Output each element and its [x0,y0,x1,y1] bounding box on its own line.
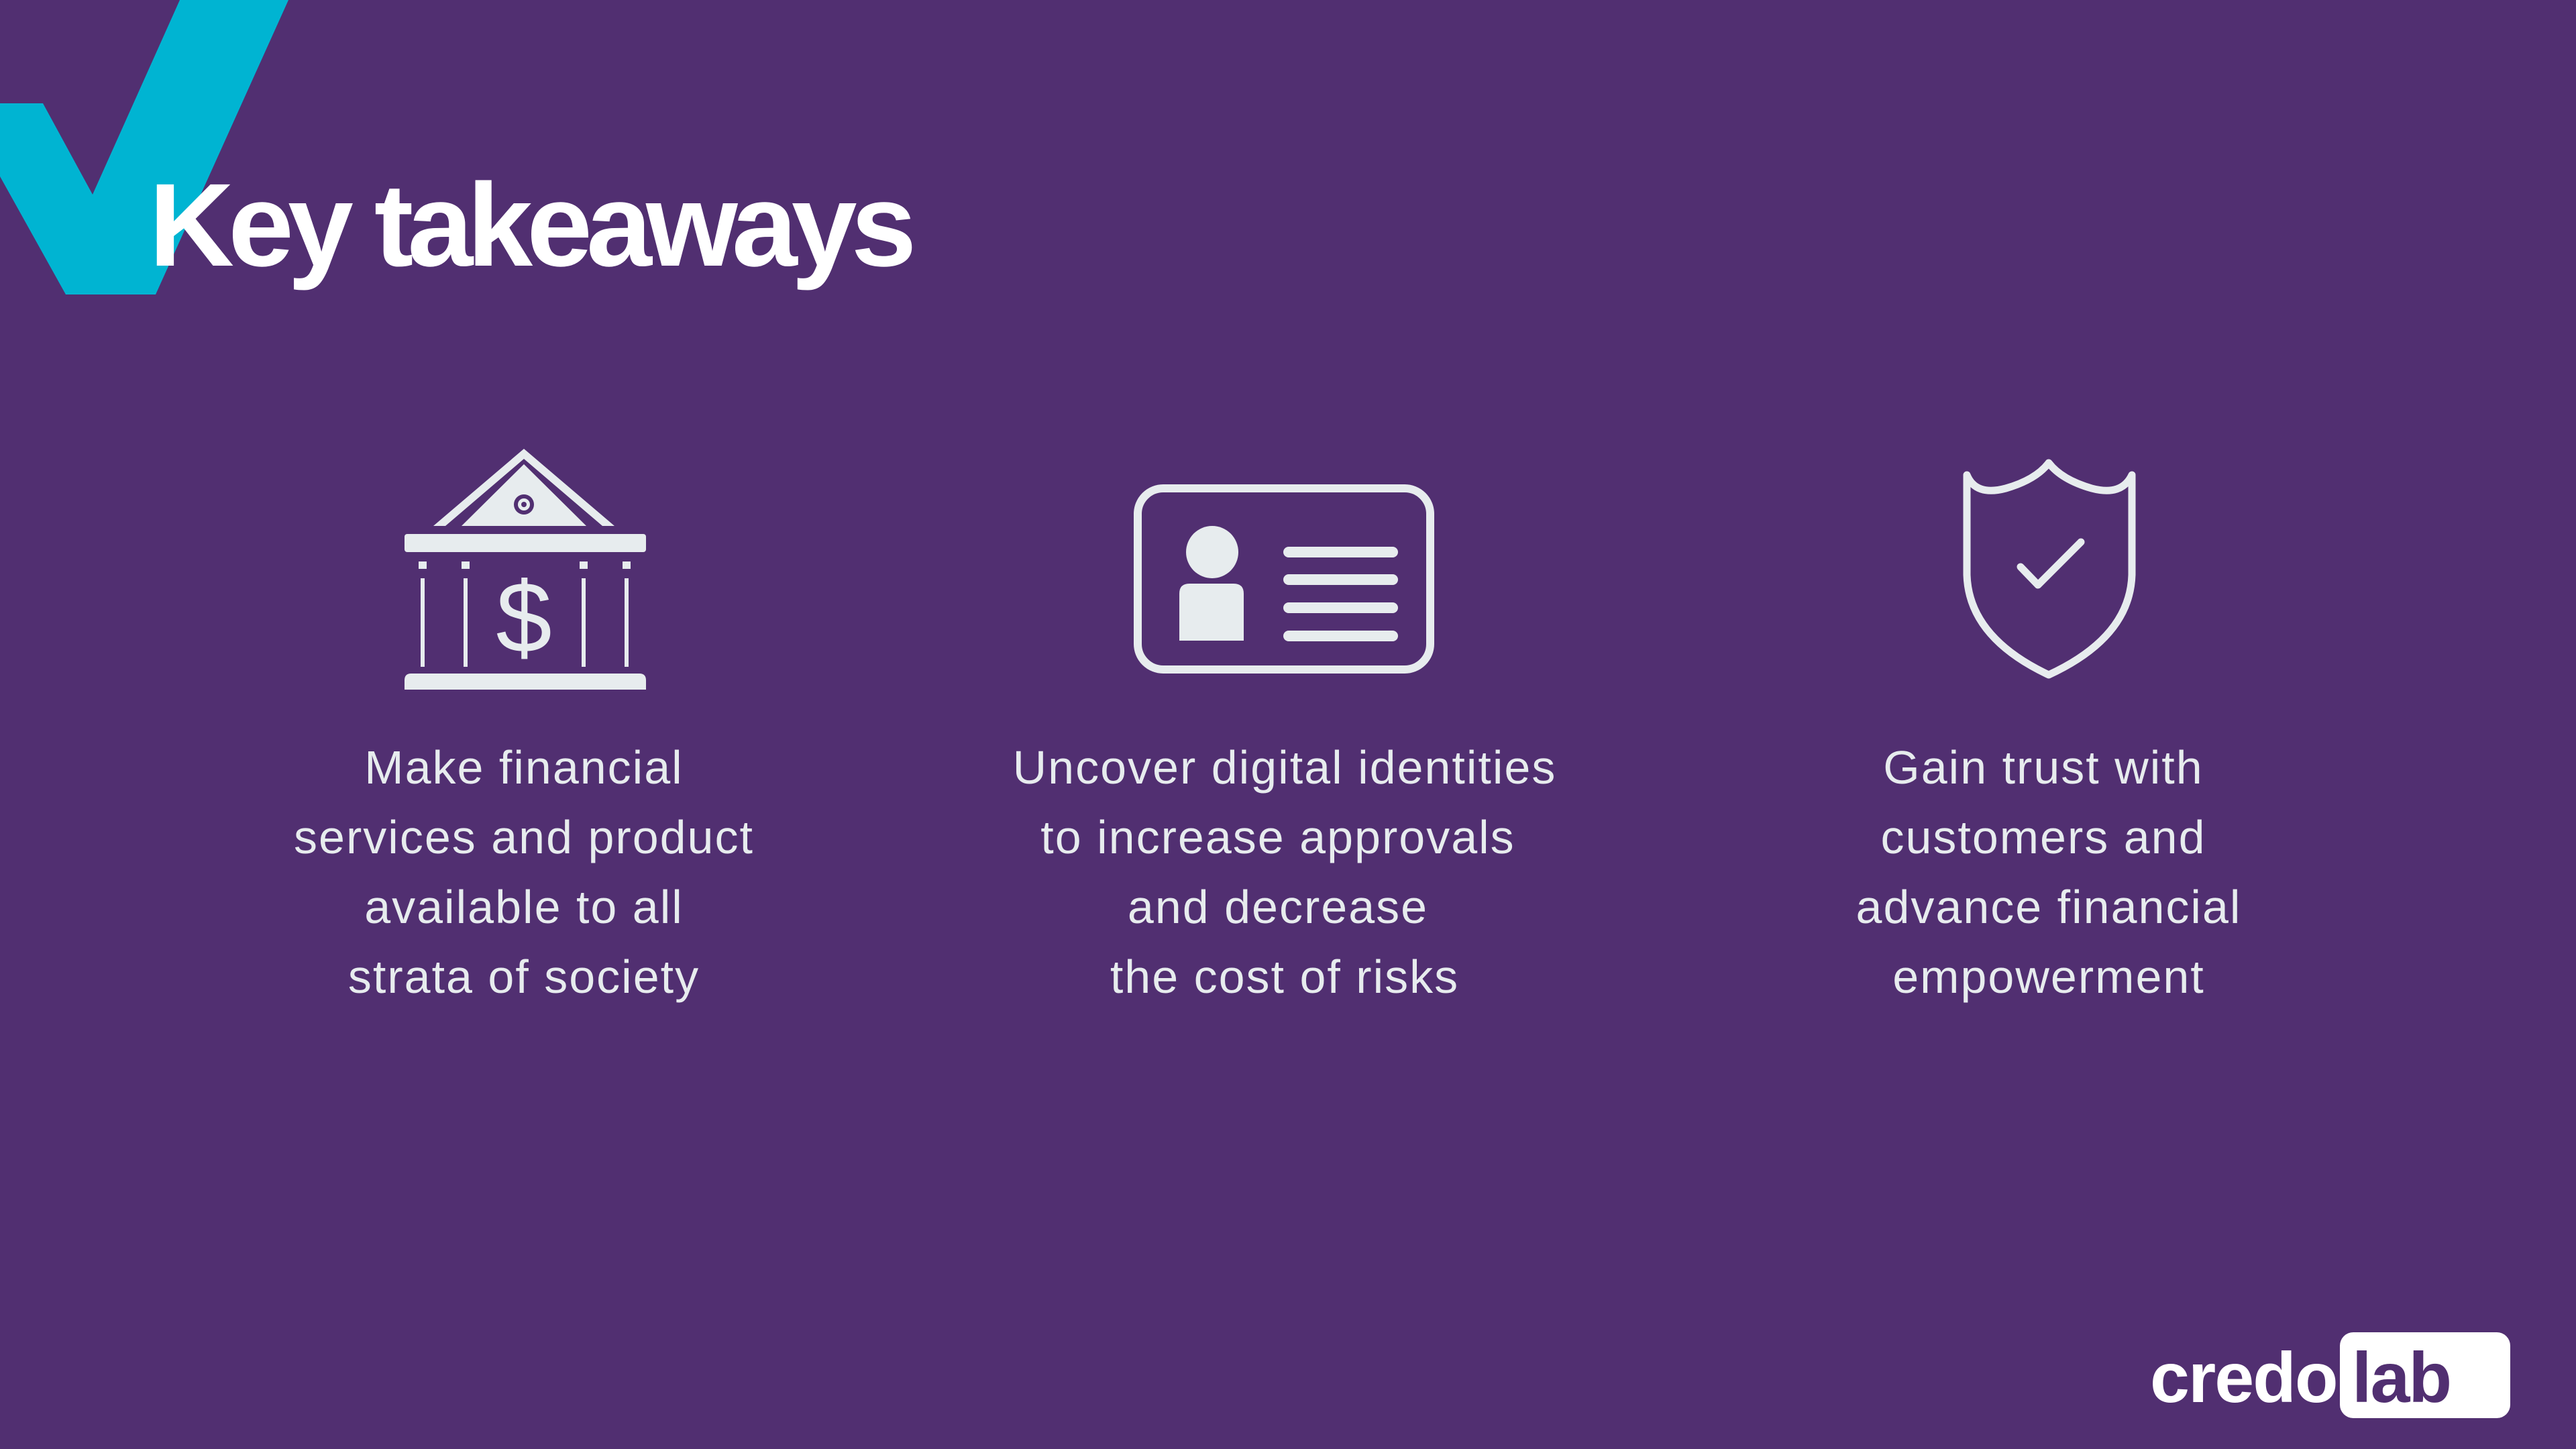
text: column 3: advance financial [1856,881,2241,933]
logo: credolab: credo [2150,1338,2337,1417]
text: column 1 [294,741,754,1003]
text: column 3: empowerment [1892,951,2205,1003]
text: column 1: available to all [364,881,684,933]
text: column 1: strata of society [348,951,700,1003]
text: column 3: Gain trust with [1883,741,2204,794]
text: column 2: to increase approvals [1040,811,1515,863]
logo: credolab [2150,1332,2510,1418]
text: column 3: customers and [1880,811,2206,863]
icon: bank: $ [496,561,552,674]
title: Key takeaways [149,160,912,291]
icon: ID card [1138,488,1430,669]
text: column 1: services and product [294,811,754,863]
text: column 2: the cost of risks [1110,951,1459,1003]
text: column 1: Make financial [364,741,684,794]
icon: bank [405,449,646,690]
icon: shield [1967,463,2132,675]
text: column 2: Uncover digital identities [1013,741,1556,794]
text: column 2: and decrease [1128,881,1428,933]
text: column 2 [1013,741,1556,1003]
decorative checkmark [0,0,288,294]
logo: credolab: lab [2352,1338,2451,1417]
text: column 3 [1856,741,2241,1003]
